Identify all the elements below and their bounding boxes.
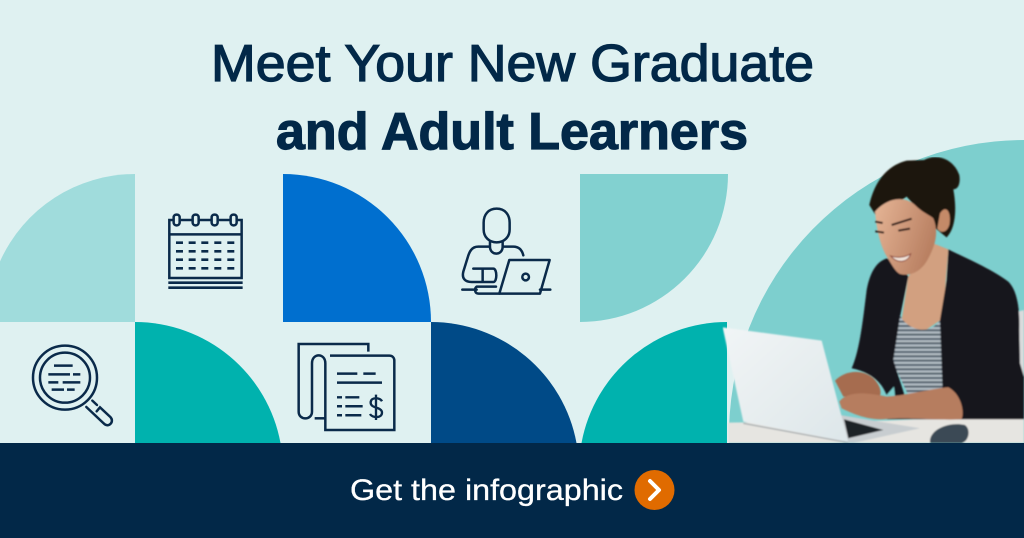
icon: orange arrow button [634, 470, 674, 510]
neck and chest skin [902, 243, 948, 334]
striped top [892, 315, 943, 395]
ear [937, 209, 950, 232]
large teal circle behind the photo [729, 140, 1024, 443]
icon: person at laptop [462, 209, 550, 294]
photo: woman working on a laptop [723, 157, 1024, 443]
far arm [835, 372, 881, 397]
footer banner [0, 443, 1024, 538]
eyes and brows [875, 219, 912, 233]
icon: magnifying glass [33, 346, 112, 425]
title: Meet Your New Graduate [211, 35, 814, 93]
laptop base and keyboard [840, 415, 920, 443]
geometric quarter-circle panels [0, 174, 728, 443]
icon: financial documents [299, 344, 394, 430]
title [211, 35, 814, 161]
face [875, 199, 936, 275]
laptop lid [723, 327, 848, 442]
smile [891, 254, 911, 261]
blazer [852, 249, 1024, 419]
near arm and hand [839, 387, 963, 420]
teal gap under sleeve [887, 387, 895, 396]
mouse [930, 424, 969, 443]
chair back [1010, 310, 1024, 397]
title: and Adult Learners [276, 103, 748, 161]
icon: calendar [168, 215, 243, 288]
hair back and bun [869, 157, 960, 237]
call to action label: Get the infographic [350, 474, 623, 507]
desk surface [728, 415, 1024, 443]
